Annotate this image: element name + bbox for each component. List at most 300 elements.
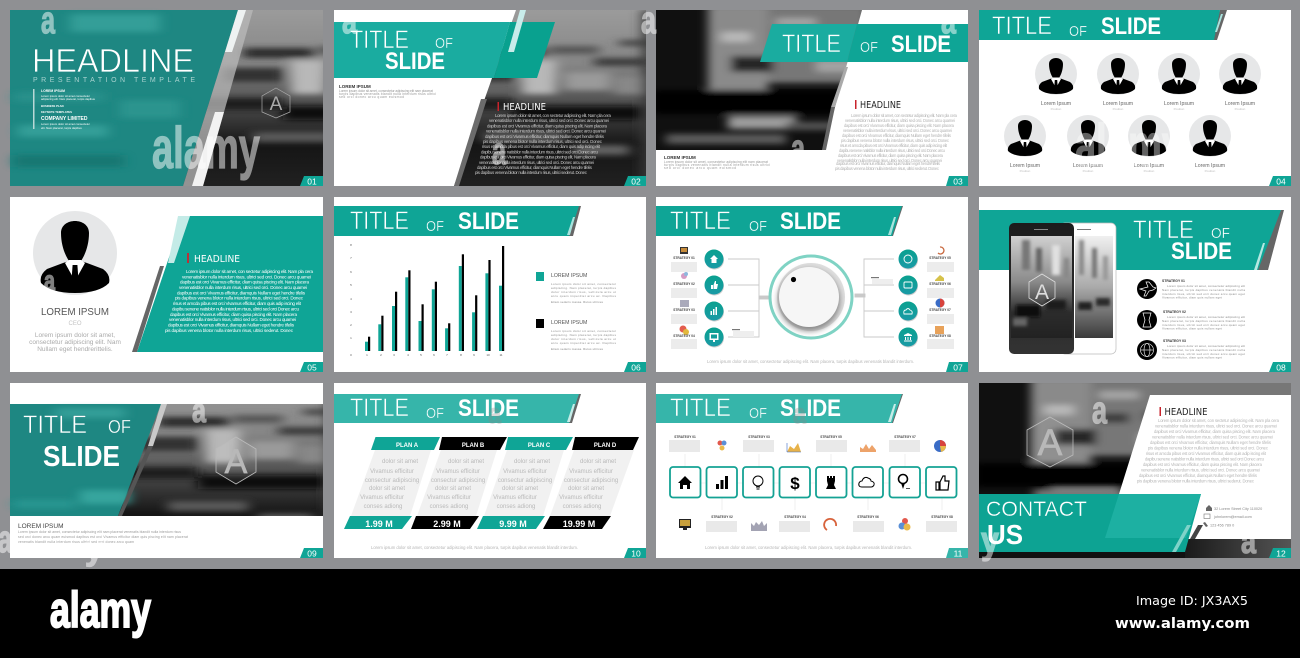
cover details: BUSINESS PLAN <box>41 104 64 108</box>
text block: lorem ipsum <box>18 523 188 544</box>
text block: body: pis dapibus venena blotor nulla interdum risus, ultrici sederut. Donec <box>475 170 588 175</box>
watermark overlay: a <box>192 392 207 430</box>
title banner: SLIDE <box>891 31 951 58</box>
headline: HEADLINE <box>503 102 546 113</box>
left strategy labels: STRATEGY 01 <box>673 256 695 260</box>
plan B: consectur adipiscing <box>431 478 485 484</box>
icon: hexagon logo: A <box>1035 281 1049 304</box>
slide 07: hub diagram <box>656 197 968 372</box>
slide number <box>624 176 646 186</box>
icon: thumb <box>936 476 949 490</box>
strategies: Lorem ipsum dolor sit amet, consectetur adipiscing elit <box>1167 344 1245 348</box>
slide 10: pricing plans <box>334 383 646 558</box>
slide number: 10 <box>631 548 641 558</box>
strategies: STRATEGY 01 <box>1162 279 1185 283</box>
team members: Lorem Ipsum <box>1073 163 1103 169</box>
watermark overlay: a <box>41 0 56 42</box>
title banner: SLIDE <box>458 208 519 235</box>
team members: Position <box>1083 169 1094 173</box>
left strategy labels: STRATEGY 03 <box>673 308 695 312</box>
text block: body: dapibus est orci Vivamus efficitur, diam quisa piscing elit. Nam placera <box>844 123 955 128</box>
text block: body: dapibus est orci Vivamus efficitur, diamquis Nullam eget hendre tifelis <box>842 133 951 138</box>
text block: body: dapibus est orci Vivamus efficitur, diam quisa piscing elit. Nam placera <box>1143 462 1263 467</box>
strategies: STRATEGY 03 <box>1163 339 1186 343</box>
icon: cloud <box>859 477 874 487</box>
text block: body: pis dapibus venena blotor nulla interdum risus, ultrici sederut. Donec <box>165 328 294 333</box>
cover details: Lorem ipsum dolor sit amet consectetur <box>41 94 90 98</box>
text block: body: dapibus est orci Vivamus efficitur, diam quisa piscing elit. Nam placera <box>170 312 297 317</box>
slide 09: section title <box>10 379 418 559</box>
title banner <box>656 394 903 423</box>
plan A: consectur adipiscing <box>365 478 419 484</box>
central dial <box>770 256 852 338</box>
title banner: OF <box>426 218 444 235</box>
title banner: SLIDE <box>1101 13 1161 40</box>
title banner: SLIDE <box>780 208 841 235</box>
mini label <box>871 277 893 284</box>
team members: Position <box>1020 169 1031 173</box>
icon: hexagon logo <box>216 437 256 484</box>
bar chart: 1 <box>366 353 368 357</box>
lower strategy labels: STRATEGY 06 <box>857 515 879 519</box>
left strategy labels <box>671 247 697 349</box>
legend: arcu quam imperdiet arcu ac. Dapibus <box>551 294 616 298</box>
slide number: 09 <box>307 548 317 558</box>
bar chart: 7 <box>350 256 352 260</box>
plan D: consectur adipiscing <box>564 478 618 484</box>
icon: hexagon logo: A <box>270 94 283 115</box>
cover details: elit. Nam placerat, turpis dapibus <box>41 126 82 130</box>
text block: body: risus et amcda pibus est orci Vivamus efficitur, diam quis adip iscing elit <box>173 301 302 306</box>
slide number <box>946 548 968 558</box>
slide number <box>1269 176 1291 186</box>
text block: body: pis dapibus venena blotor nulla interdum risus, ultrici sederut. Donec <box>835 166 939 171</box>
slide 11: timeline of icons <box>656 383 968 558</box>
plan C: conses adiong <box>497 504 535 510</box>
watermark overlay: a <box>44 265 55 296</box>
title: SLIDE <box>43 441 120 473</box>
slide number: 07 <box>953 362 963 372</box>
left icon circles <box>704 250 724 348</box>
text block: body: Lorem ipsum dolor sit amet, con sectetur adipiscing elit. Nam pla cera <box>851 113 958 118</box>
connector lines <box>670 454 957 510</box>
bar chart: 4 <box>407 353 409 357</box>
text block: body: venenatisblor nulla interdum risus, ultrici sed orci. Donec arcu quamei <box>837 158 942 163</box>
profile text: Lorem ipsum dolor sit amet, <box>35 332 115 339</box>
legend: Etiam sederis massa. Rutus ultrices <box>551 347 604 351</box>
text block: body: venenatisblor nulla interdum risus, ultrici sed orci. Donec arcu quamei <box>169 317 296 322</box>
text block: lorem ipsum: LOREM IPSUM <box>18 523 64 530</box>
lower strategy labels: STRATEGY 08 <box>931 515 953 519</box>
plan C <box>477 437 573 529</box>
text block: body <box>835 113 958 171</box>
plan C: consectur adipiscing <box>498 478 552 484</box>
text block: lorem ipsum <box>339 84 436 99</box>
text block: lorem ipsum: sed orci donec arcu quam euismod dapibus est orci Vivamus efficitur diam quis piscing elit nam placerat <box>18 535 188 539</box>
connector lines <box>728 259 894 337</box>
footnote: Lorem ipsum dolor sit amet, consectetur adipiscing elit. Nam placera, turpis dapibus venenatis blandit interdum. <box>705 545 912 550</box>
slide 12: contact <box>974 378 1291 563</box>
plan columns <box>351 450 634 516</box>
legend: adipiscing. Nam placerat, turpis dapibus <box>551 286 616 290</box>
text block: body: dapibus est orci Vivamus efficitur, diamquis Nullam eget hendre tifelis <box>836 161 940 166</box>
cover details: Lorem ipsum dolor sit amet consectetur <box>41 122 90 126</box>
watermark overlay: alamy <box>152 116 260 181</box>
text block: lorem ipsum: LOREM IPSUM <box>339 84 371 89</box>
plan D <box>543 437 639 529</box>
text block: body: risus et amcda pibus est orci Vivamus efficitur, diam quis adip iscing elit <box>1146 451 1267 456</box>
slide number <box>624 362 646 372</box>
text block: body: dapibu senene natisblor nulla interdum risus, ultrici sed orci Donec arcu <box>172 306 299 311</box>
title banner <box>334 10 555 78</box>
title banner: TITLE <box>992 12 1052 40</box>
watermark overlay: a <box>941 0 957 42</box>
text block: lorem ipsum: Lorem ipsum dolor sit amet, consectetur adipiscing elit nam placerat <box>664 160 768 164</box>
text block: body <box>1137 418 1280 484</box>
plan C: 9.99 M <box>499 519 527 529</box>
slide 05: profile <box>10 197 323 372</box>
slide number <box>300 548 323 558</box>
icon: bars <box>716 476 728 489</box>
slide 03: title and headline <box>651 5 968 190</box>
strategies: interdum risus, ultrici sed orci donec arcu quam eget <box>1162 323 1245 327</box>
right strategy labels: STRATEGY 05 <box>929 256 951 260</box>
contact banner: US <box>987 519 1023 550</box>
strategies: Lorem ipsum dolor sit amet, consectetur adipiscing elit <box>1167 284 1245 288</box>
icon: pin <box>898 474 910 489</box>
text block: body: dapibus est orci Vivamus efficitur, diam quisa piscing elit. Nam placera <box>180 280 309 285</box>
text block: lorem ipsum: LOREM IPSUM <box>664 155 696 160</box>
bar chart: 1 <box>350 336 352 340</box>
team members: Lorem Ipsum <box>1010 163 1040 169</box>
title banner <box>334 206 581 236</box>
contact details: 123 456 789 0 <box>1210 524 1234 528</box>
team members: Position <box>1235 107 1246 111</box>
title banner: TITLE <box>670 394 731 422</box>
text block: lorem ipsum: Lorem ipsum dolor sit amet, consectetur adipiscing elit nam placerat <box>339 89 433 93</box>
text block: lorem ipsum: sed orci donec arcu quam euismod <box>339 95 404 99</box>
title banner: SLIDE <box>385 48 445 75</box>
text block: body: risus et amcda pibus est orci Vivamus efficitur, diam quis adip iscing elit <box>482 144 601 149</box>
text block: body: dapibu senene natisblor nulla interdum risus, ultrici sed orci Donec arcu <box>839 148 946 153</box>
black phone <box>1009 223 1074 354</box>
legend: Lorem ipsum dolor sit amet, consectetur <box>551 329 616 333</box>
plan C: PLAN C <box>528 443 551 449</box>
strategies: Vivamus efficitur, diam quis nullam eget <box>1162 356 1222 360</box>
icon: chess rook <box>826 476 836 489</box>
title banner: TITLE <box>1133 216 1194 244</box>
footer bar <box>0 569 1300 658</box>
plan D: Vivamus efficitur <box>569 469 613 475</box>
headline: HEADLINE <box>860 100 901 111</box>
slide number: 12 <box>1276 548 1286 558</box>
text block: lorem ipsum: Lorem ipsum dolor sit amet, consectetur adipiscing elit nam placerat venenatis blandit nulla interdum risus <box>18 530 181 534</box>
bar chart: 10 <box>486 353 490 357</box>
lower strategy labels: STRATEGY 04 <box>784 515 806 519</box>
icon: hexagon logo <box>1027 417 1073 467</box>
cover details: LOREM IPSUM <box>41 89 65 93</box>
slide 04: team <box>979 10 1291 186</box>
text block: body: dapibus est orci Vivamus efficitur, diamquis Nullam eget hendre tifelis <box>485 134 605 139</box>
text block: body: pis dapibus venena blotor nulla interdum risus, ultrici sederut. Donec <box>1137 478 1254 484</box>
slide number: 03 <box>953 176 963 186</box>
team members: Lorem Ipsum <box>1164 101 1194 107</box>
strategies <box>1137 279 1245 360</box>
icon: home <box>678 476 692 489</box>
icon: dollar: $ <box>790 474 800 493</box>
alamy logo: alamy <box>50 582 151 638</box>
title banner <box>656 206 903 236</box>
contact banner: CONTACT <box>986 497 1087 521</box>
profile text: CEO <box>68 321 82 327</box>
team members: Position <box>1113 107 1124 111</box>
slide number: 06 <box>631 362 641 372</box>
title banner <box>334 394 581 423</box>
title banner <box>979 210 1284 270</box>
bar chart: 2 <box>380 353 382 357</box>
watermark overlay: y <box>981 520 999 562</box>
headline: HEADLINE <box>32 42 194 79</box>
watermark overlay: a <box>1092 390 1108 432</box>
lower strategy labels <box>679 515 957 532</box>
text block: body: venenatisblor nulla interdum risus, ultrici sed orci. Donec arcu quamei <box>486 129 606 134</box>
plan B: PLAN B <box>462 443 485 449</box>
text block: body: venenatisblor nulla interdum risus, ultrici sed orci. Donec arcu quamei <box>845 118 955 123</box>
text block: body: dapibu senene natisblor nulla interdum risus, ultrici sed orci Donec arcu <box>1145 456 1265 462</box>
title <box>23 411 131 473</box>
team members: Position <box>1051 107 1062 111</box>
slide number <box>946 176 968 186</box>
text block: body: venenatisblor nulla interdum risus, ultrici sed orci. Donec arcu quamei <box>489 118 609 123</box>
text block: body: dapibus est orci Vivamus efficitur, diamquis Nullam eget hendre tifelis <box>1139 473 1257 478</box>
text block: body: pis dapibus venena blotor nulla interdum risus, ultrici sed orci. Donec <box>841 138 949 143</box>
plan B: dolor sit amet <box>448 459 484 465</box>
left strategy labels: STRATEGY 02 <box>673 282 695 286</box>
title banner: OF <box>1211 225 1230 242</box>
bar chart: 6 <box>433 353 435 357</box>
text block: body: dapibu senene natisblor nulla interdum risus, ultrici sed orci Donec arcu <box>481 149 599 154</box>
bar chart: 2 <box>350 323 352 327</box>
team members: Position <box>1174 107 1185 111</box>
contact details <box>1203 505 1262 528</box>
watermark overlay: alamy <box>1075 113 1183 178</box>
text block: body: dapibus est orci Vivamus efficitur, diamquis Nullam eget hendre tifelis <box>477 165 593 170</box>
slide number <box>1269 362 1291 372</box>
text block: body: dapibus est orci Vivamus efficitur, diam quisa piscing elit. Nam placera <box>838 153 944 158</box>
plan A <box>344 437 440 529</box>
title banner: OF <box>860 39 878 56</box>
title banner: OF <box>426 405 444 422</box>
profile text: consectetur adipiscing elit. Nam <box>29 339 121 346</box>
slide number: 04 <box>1276 176 1286 186</box>
slide number <box>946 362 968 372</box>
headline: HEADLINE <box>194 254 240 265</box>
bar chart <box>350 243 504 357</box>
title banner: SLIDE <box>458 395 519 422</box>
subtitle: PRESENTATION TEMPLATE <box>33 77 195 84</box>
strategies: interdum risus, ultrici sed orci donec arcu quam eget <box>1162 292 1245 296</box>
title banner: TITLE <box>350 207 409 235</box>
profile text: LOREM IPSUM <box>41 306 109 318</box>
right strategy labels: STRATEGY 06 <box>929 282 951 286</box>
legend: dolor interdum risus, vehicula arcu ut <box>551 290 616 294</box>
team members: Lorem Ipsum <box>1103 101 1133 107</box>
plan D: Vivamus efficitur <box>559 495 603 501</box>
text block: body: venenatisblor nulla interdum risus, ultrici sed orci. Donec arcu quamei <box>179 285 307 290</box>
text block: body: Lorem ipsum dolor sit amet, con sectetur adipiscing elit. Nam pla cera <box>495 113 612 118</box>
text block: body: dapibus est orci Vivamus efficitur, diam quisa piscing elit. Nam placera <box>480 155 597 160</box>
plan C: Vivamus efficitur <box>503 469 547 475</box>
bar chart: 8 <box>460 353 462 357</box>
text block: body: dapibus est orci Vivamus efficitur, diam quisa piscing elit. Nam placera <box>1154 429 1276 434</box>
watermark overlay: a <box>488 398 501 429</box>
plan C: dolor sit amet <box>502 486 538 492</box>
plan A: conses adiong <box>364 504 402 510</box>
title banner <box>979 10 1227 40</box>
strategies: Nam placerat, turpis dapibus venenatis blandit nulla <box>1162 319 1245 323</box>
text block: lorem ipsum <box>664 155 770 170</box>
plan B: Vivamus efficitur <box>427 495 471 501</box>
upper strategy labels: STRATEGY 05 <box>820 435 842 439</box>
cover details: adipiscing elit. Nam placerat, turpis dapibus <box>41 97 96 101</box>
bar chart: 5 <box>420 353 422 357</box>
profile text <box>29 306 121 353</box>
title banner: TITLE <box>782 30 841 58</box>
image id: Image ID: JX3AX5 <box>1136 594 1248 608</box>
strategies: STRATEGY 02 <box>1163 310 1186 314</box>
mini label <box>732 329 754 337</box>
slide number <box>300 176 323 186</box>
white phone <box>1060 223 1116 354</box>
strategies: Vivamus efficitur, diam quis nullam eget <box>1162 326 1222 330</box>
text block: lorem ipsum: turpis dapibus venenatis blandit nulla interdum risus ultrici <box>339 92 436 96</box>
text block: lorem ipsum: sed orci donec arcu quam euismod <box>664 166 736 170</box>
contact details: johnlorem@email.com <box>1213 515 1252 519</box>
legend: adipiscing. Nam placerat, turpis dapibus <box>551 333 616 337</box>
bar chart: 8 <box>350 243 352 247</box>
title banner <box>760 24 968 62</box>
slide number <box>624 548 646 558</box>
slide number: 05 <box>307 362 317 372</box>
strategies: Lorem ipsum dolor sit amet, consectetur adipiscing elit <box>1167 315 1245 319</box>
bar chart: 6 <box>350 270 352 274</box>
icon: hexagon logo <box>262 88 290 118</box>
legend: LOREM IPSUM <box>551 320 587 326</box>
text block: body: risus et amcda pibus est orci Vivamus efficitur, diam quis adip iscing elit <box>840 143 948 148</box>
strategies: Nam placerat, turpis dapibus venenatis blandit nulla <box>1162 288 1245 292</box>
text block: lorem ipsum: venenatis blandit nulla interdum risus ultrici sed orci donec arcu quam <box>18 540 134 544</box>
plan D: dolor sit amet <box>568 486 604 492</box>
title banner: SLIDE <box>780 395 841 422</box>
watermark overlay: a <box>791 128 806 170</box>
plan A: 1.99 M <box>365 519 393 529</box>
title banner: OF <box>749 405 767 422</box>
legend: Etiam sederis massa. Rutus ultrices <box>551 300 604 304</box>
legend: arcu quam imperdiet arcu ac. Dapibus <box>551 341 616 345</box>
watermark overlay: a <box>641 0 657 42</box>
slide 06: bar chart <box>334 197 646 372</box>
plan C: Vivamus efficitur <box>493 495 537 501</box>
slide number: 02 <box>631 176 641 186</box>
upper strategy labels: STRATEGY 03 <box>748 435 770 439</box>
slide number: 11 <box>954 548 963 558</box>
bar chart: 4 <box>350 297 352 301</box>
watermark overlay: a <box>793 398 806 429</box>
title banner: TITLE <box>350 394 409 422</box>
plan B: dolor sit amet <box>435 486 471 492</box>
title banner: SLIDE <box>1171 238 1232 265</box>
title banner: TITLE <box>670 207 731 235</box>
text block: body: Lorem ipsum dolor sit amet, con sectetur adipiscing elit. Nam pla cera <box>1158 418 1280 423</box>
text block: body: venenatisblor nulla interdum risus, ultrici sed orci. Donec arcu quamei <box>843 128 952 133</box>
title banner: OF <box>1069 23 1087 40</box>
title banner: TITLE <box>350 26 409 54</box>
bar chart: 5 <box>350 283 352 287</box>
text block: body: dapibus est orci Vivamus efficitur, diamquis Nullam eget hendre tifelis <box>1150 440 1271 445</box>
team members: Position <box>1205 169 1216 173</box>
plan D: 19.99 M <box>563 519 595 529</box>
legend: Lorem ipsum dolor sit amet, consectetur <box>551 282 616 286</box>
team members: Position <box>1144 169 1155 173</box>
icon: bulb <box>753 476 763 489</box>
cover details <box>33 89 96 130</box>
text block: lorem ipsum: turpis dapibus venenatis blandit nulla interdum risus ultrici <box>664 163 770 167</box>
plan B: 2.99 M <box>433 519 461 529</box>
footnote: Lorem ipsum dolor sit amet, consectetur adipiscing elit. Nam placera, turpis dapibus venenatis blandit interdum. <box>707 359 914 364</box>
right strategy labels: STRATEGY 07 <box>929 308 951 312</box>
footnote: Lorem ipsum dolor sit amet, consectetur adipiscing elit. Nam placera, turpis dapibus venenatis blandit interdum. <box>371 545 578 550</box>
strategies: Vivamus efficitur, diam quis nullam eget <box>1162 296 1222 300</box>
icon: hexagon logo: A <box>225 443 248 481</box>
text block: body: dapibus est orci Vivamus efficitur, diamquis Nullam eget hendre tifelis <box>177 290 306 295</box>
title banner: OF <box>749 218 767 235</box>
text block: body <box>475 113 612 175</box>
slide 08: phones <box>979 197 1291 372</box>
team members: Lorem Ipsum <box>1041 101 1071 107</box>
watermark overlay: a <box>342 0 358 42</box>
slide number: 01 <box>307 176 317 186</box>
strategies: Nam placerat, turpis dapibus venenatis blandit nulla <box>1162 348 1245 352</box>
text block: body: venenatisblor nulla interdum risus, ultrici sed orci. Donec arcu quamei <box>182 274 311 279</box>
plan A: dolor sit amet <box>369 486 405 492</box>
plan C: dolor sit amet <box>514 459 550 465</box>
icon: portrait <box>33 211 117 295</box>
plan A: Vivamus efficitur <box>360 495 404 501</box>
plan D: PLAN D <box>594 443 617 449</box>
strategies: interdum risus, ultrici sed orci donec arcu quam eget <box>1162 352 1245 356</box>
text block: body: venenatisblor nulla interdum risus, ultrici sed orci. Donec arcu quamei <box>1141 468 1260 472</box>
title: TITLE <box>23 411 87 439</box>
cover details: COMPANY LIMITED <box>41 116 88 122</box>
right strategy labels <box>927 247 954 349</box>
text block: body: pis dapibus venena blotor nulla interdum risus, ultrici sed orci. Donec <box>483 139 603 144</box>
upper strategy labels <box>669 435 946 452</box>
bar chart: 3 <box>393 353 395 357</box>
plan A: PLAN A <box>396 443 419 449</box>
plan D: conses adiong <box>563 504 601 510</box>
plan A: dolor sit amet <box>382 459 418 465</box>
title banner: OF <box>435 35 453 52</box>
text block: body: venenatisblor nulla interdum risus, ultrici sed orci. Donec arcu quamei <box>1155 424 1277 428</box>
icon boxes <box>670 467 956 498</box>
plan B: conses adiong <box>430 504 468 510</box>
slide 01: cover <box>10 10 503 190</box>
upper strategy labels: STRATEGY 01 <box>674 435 696 439</box>
slide 02: title and headline <box>334 10 734 190</box>
slide number <box>300 362 323 372</box>
plan B <box>411 437 507 529</box>
text block: body: venenatisblor nulla interdum risus, ultrici sed orci. Donec arcu quamei <box>1152 434 1273 440</box>
